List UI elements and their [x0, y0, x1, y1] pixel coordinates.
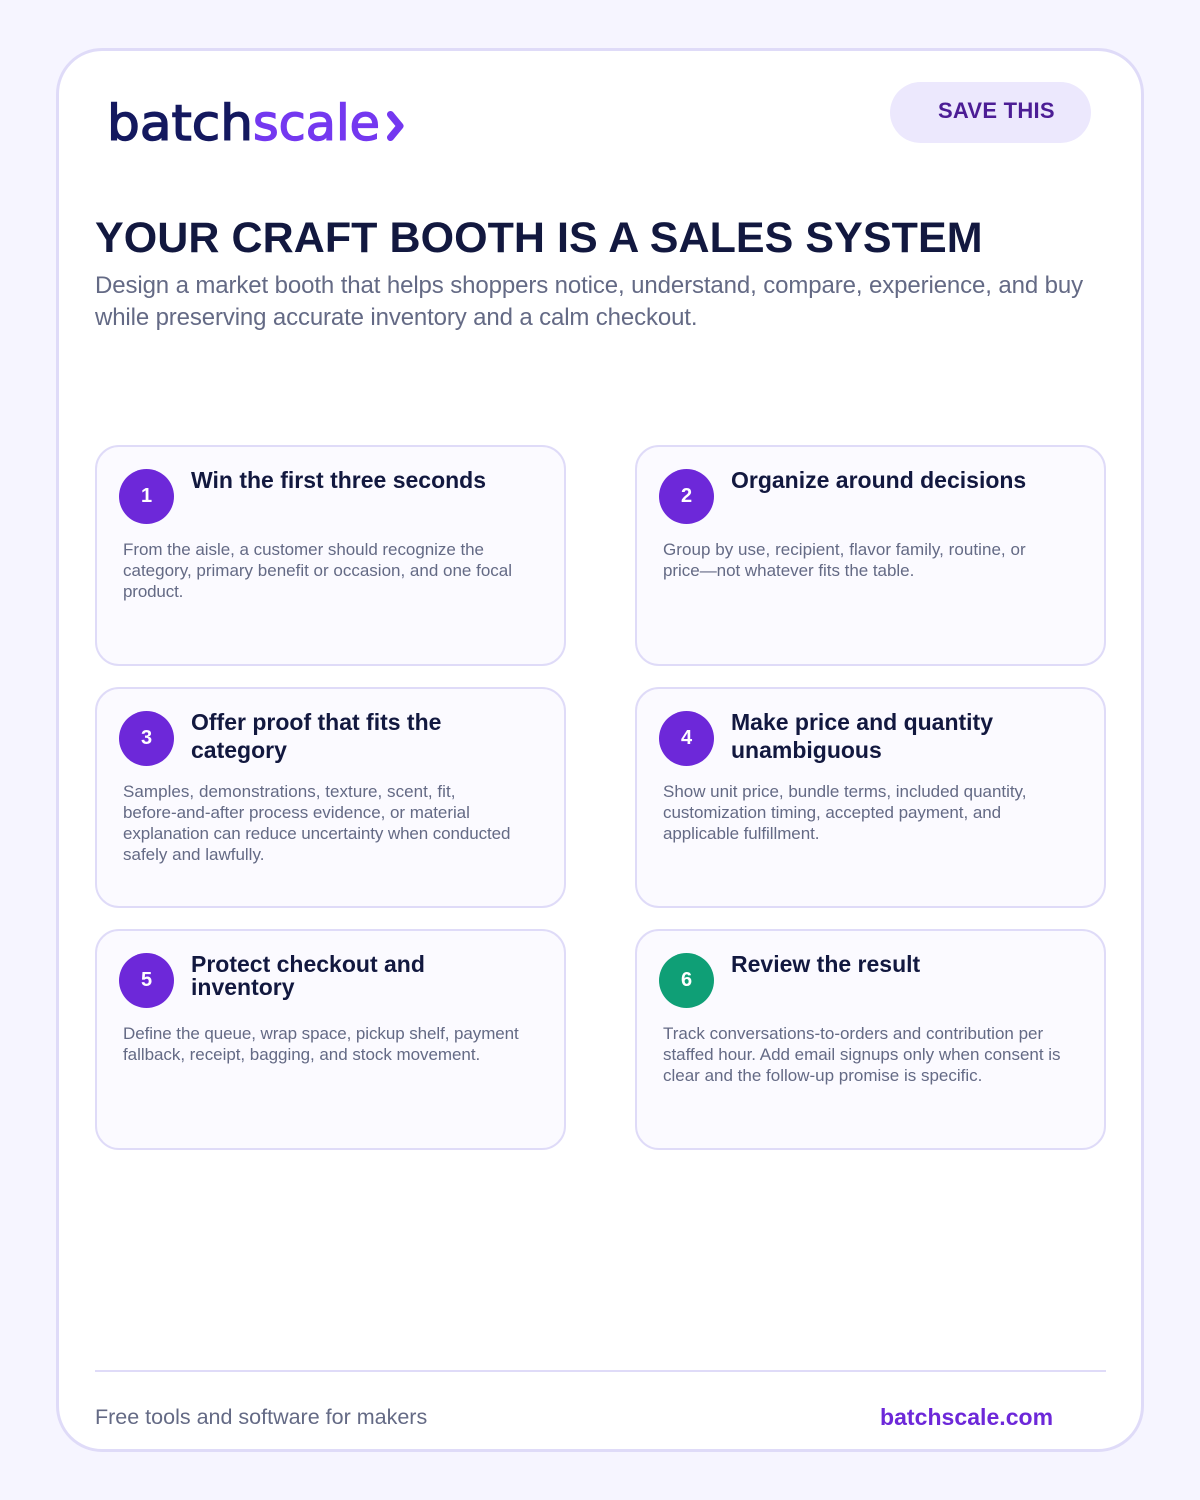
body 3	[123, 782, 510, 864]
card 3	[95, 687, 566, 908]
body 6	[663, 1024, 1060, 1085]
logo: scale	[253, 95, 380, 152]
heading 2: Organize around decisions	[731, 467, 1026, 493]
step number 2	[659, 469, 714, 524]
body 1: category, primary benefit or occasion, and one focal	[123, 561, 512, 580]
footer tagline: Free tools and software for makers	[95, 1405, 427, 1429]
body 6: staffed hour. Add email signups only when consent is	[663, 1045, 1060, 1064]
footer rule	[95, 1370, 1106, 1372]
heading 4: unambiguous	[731, 737, 882, 763]
body 5: fallback, receipt, bagging, and stock movement.	[123, 1045, 480, 1064]
step number 3	[119, 711, 174, 766]
card 1	[95, 445, 566, 666]
step number 5	[119, 953, 174, 1008]
body 4	[663, 782, 1026, 843]
body 4: Show unit price, bundle terms, included quantity,	[663, 782, 1026, 801]
heading 1: Win the first three seconds	[191, 467, 486, 493]
body 2	[663, 540, 1026, 580]
heading 5: inventory	[191, 974, 295, 1000]
heading 6: Review the result	[731, 951, 920, 977]
body 4: applicable fulfillment.	[663, 824, 819, 843]
body 3: safely and lawfully.	[123, 845, 264, 864]
step number 3: 3	[141, 727, 152, 749]
subtitle: Design a market booth that helps shoppers notice, understand, compare, experience, and buy	[95, 272, 1083, 299]
save this badge	[890, 82, 1091, 143]
body 3: Samples, demonstrations, texture, scent, fit,	[123, 782, 456, 801]
body 1: product.	[123, 582, 183, 601]
step number 6: 6	[681, 969, 692, 991]
body 3: explanation can reduce uncertainty when conducted	[123, 824, 510, 843]
heading 3: Offer proof that fits the	[191, 709, 441, 735]
step number 5: 5	[141, 969, 152, 991]
body 1: From the aisle, a customer should recognize the	[123, 540, 484, 559]
body 5: Define the queue, wrap space, pickup shelf, payment	[123, 1024, 519, 1043]
body 3: before-and-after process evidence, or material	[123, 803, 470, 822]
heading 4	[731, 709, 993, 763]
body 6: Track conversations-to-orders and contribution per	[663, 1024, 1043, 1043]
body 5	[123, 1024, 519, 1064]
heading 5	[191, 951, 425, 1000]
subtitle: while preserving accurate inventory and a calm checkout.	[95, 304, 697, 331]
logo	[107, 95, 404, 152]
heading 3: category	[191, 737, 287, 763]
step number 6	[659, 953, 714, 1008]
step number 1: 1	[141, 485, 152, 507]
body 2: price—not whatever fits the table.	[663, 561, 914, 580]
save this badge: SAVE THIS	[938, 98, 1055, 123]
body 2: Group by use, recipient, flavor family, routine, or	[663, 540, 1026, 559]
step number 4: 4	[681, 727, 692, 749]
footer url: batchscale.com	[880, 1404, 1053, 1430]
body 6: clear and the follow-up promise is specific.	[663, 1066, 982, 1085]
card 2	[635, 445, 1106, 666]
card 6	[635, 929, 1106, 1150]
heading 3	[191, 709, 441, 763]
body 4: customization timing, accepted payment, and	[663, 803, 1001, 822]
heading 4: Make price and quantity	[731, 709, 993, 735]
logo: batch	[107, 95, 253, 152]
card 4	[635, 687, 1106, 908]
step number 2: 2	[681, 485, 692, 507]
heading 5: Protect checkout and	[191, 951, 425, 977]
body 1	[123, 540, 512, 601]
card 5	[95, 929, 566, 1150]
title: YOUR CRAFT BOOTH IS A SALES SYSTEM	[95, 214, 983, 262]
subtitle	[95, 272, 1083, 331]
step number 1	[119, 469, 174, 524]
step number 4	[659, 711, 714, 766]
